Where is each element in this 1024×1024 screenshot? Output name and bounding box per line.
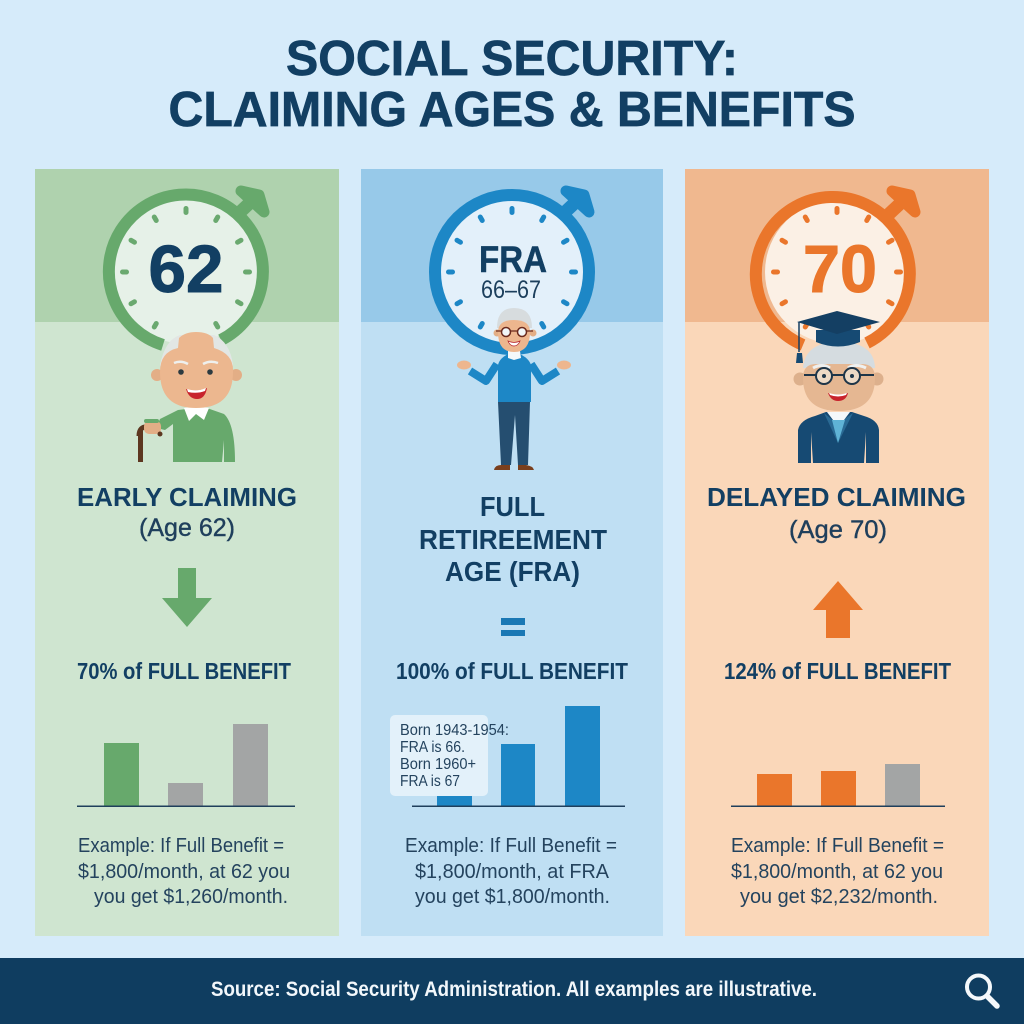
text: delayed example: Example: If Full Benefit = (731, 835, 944, 857)
heading: early claiming: (Age 62) (139, 514, 235, 542)
icon: clock showing FRA (435, 191, 589, 349)
callout: birth years (390, 715, 509, 796)
icon: clock showing FRA: 66–67 (481, 276, 541, 304)
text: FRA example (405, 835, 617, 908)
icon: clock showing age 62: 62 (148, 232, 224, 307)
text: 124 percent: 124% of FULL BENEFIT (724, 658, 951, 684)
text: source: Source: Social Security Administration. All examples are illustrative. (211, 978, 817, 1001)
icon: clock showing FRA: FRA (479, 239, 547, 280)
heading: full retirement age: AGE (FRA) (445, 556, 580, 587)
text: 70 percent: 70% of FULL BENEFIT (77, 658, 291, 684)
text: delayed example: you get $2,232/month. (740, 886, 938, 908)
icon: older man with cane (138, 332, 242, 462)
panel: delayed claiming (685, 169, 989, 936)
heading: delayed claiming: (Age 70) (789, 516, 887, 544)
heading: full retirement age: RETIREEMENT (419, 524, 607, 555)
text: FRA example: you get $1,800/month. (415, 886, 610, 908)
callout: birth years: Born 1943-1954: (400, 722, 509, 739)
heading: early claiming (77, 482, 297, 542)
icon: graduate with cap (794, 311, 884, 463)
text: early example (78, 835, 290, 908)
bar chart: delayed (731, 764, 945, 807)
icon: down arrow (162, 568, 212, 627)
heading: full retirement age: FULL (480, 491, 545, 522)
callout: birth years: FRA is 67 (400, 773, 460, 790)
text: delayed example (731, 835, 944, 908)
icon: clock showing age 62 (109, 191, 264, 345)
heading: full retirement age (419, 491, 607, 587)
icon: clock showing age 70: 70 (803, 232, 877, 307)
title (168, 32, 856, 137)
text: delayed example: $1,800/month, at 62 you (731, 861, 943, 883)
footer bar (0, 958, 1024, 1024)
text: early example: Example: If Full Benefit = (78, 835, 284, 857)
panel: early claiming (35, 169, 339, 936)
text: early example: you get $1,260/month. (94, 886, 288, 908)
icon: up arrow (813, 581, 863, 638)
bar chart: FRA (412, 706, 625, 807)
text: early example: $1,800/month, at 62 you (78, 861, 290, 883)
callout: birth years: FRA is 66. (400, 739, 465, 756)
panel: full retirement age (361, 169, 663, 936)
text: FRA example: $1,800/month, at FRA (415, 861, 610, 883)
icon: equals sign (501, 618, 525, 636)
icon: magnifier (967, 976, 997, 1006)
bar chart: early (77, 724, 295, 807)
heading: delayed claiming (707, 482, 966, 544)
icon: clock showing age 70 (756, 191, 915, 345)
heading: early claiming: EARLY CLAIMING (77, 482, 297, 512)
text: FRA example: Example: If Full Benefit = (405, 835, 617, 857)
heading: delayed claiming: DELAYED CLAIMING (707, 482, 966, 512)
title: SOCIAL SECURITY: (286, 32, 738, 86)
title: CLAIMING AGES & BENEFITS (168, 83, 856, 137)
text: 100 percent: 100% of FULL BENEFIT (396, 658, 628, 684)
icon: man with open arms (457, 308, 571, 470)
callout: birth years: Born 1960+ (400, 756, 476, 773)
